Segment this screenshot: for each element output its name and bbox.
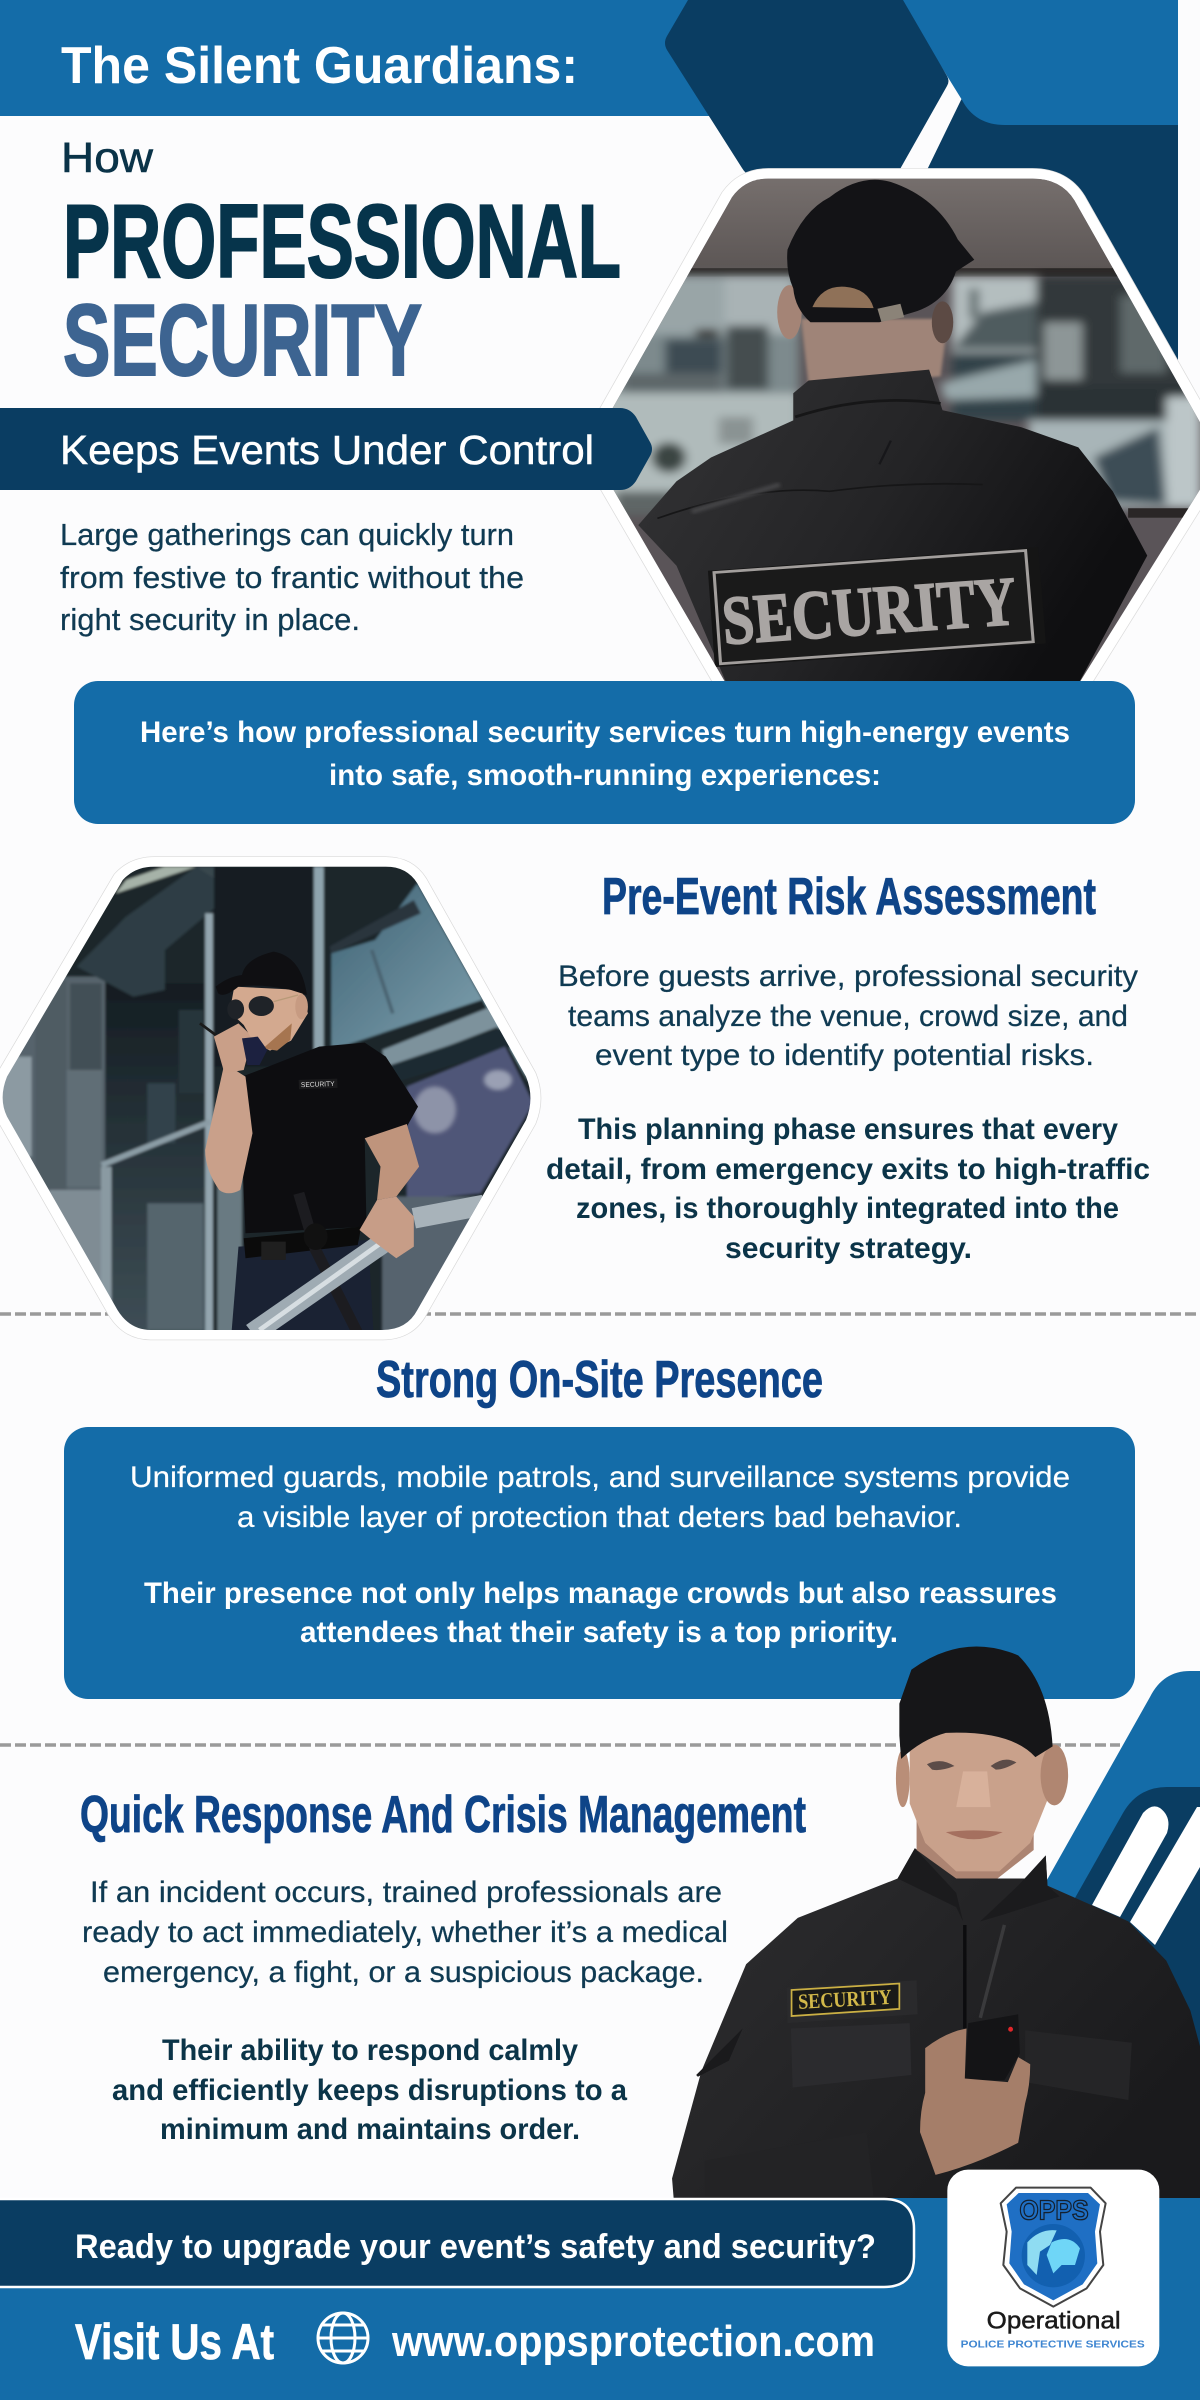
footer website: www.oppsprotection.com — [391, 2317, 875, 2366]
name patch — [787, 1980, 918, 2023]
intro text — [60, 517, 524, 637]
radio — [980, 1925, 1004, 2018]
footer background — [0, 2198, 1200, 2400]
bright glass — [331, 883, 530, 1083]
intro banner: Here’s how professional security services turn high-energy events — [140, 716, 1070, 749]
section one emphasis: This planning phase ensures that every — [578, 1113, 1118, 1146]
top right navy block — [926, 98, 1178, 400]
section three heading: Quick Response And Crisis Management — [80, 1786, 806, 1844]
name patch: SECURITY — [797, 1984, 892, 2014]
cap — [787, 180, 974, 322]
sleeve pocket — [696, 2029, 743, 2077]
divider line one — [0, 1312, 1200, 1316]
cap — [216, 952, 307, 995]
dark window — [105, 983, 210, 1337]
sunglasses — [227, 996, 274, 1019]
overhang — [77, 867, 215, 998]
right arm — [365, 1124, 419, 1200]
head — [230, 987, 308, 1051]
hand — [920, 2029, 1030, 2175]
section three body — [82, 1876, 728, 1989]
section one body: event type to identify potential risks. — [595, 1039, 1094, 1072]
section two heading: Strong On-Site Presence — [376, 1351, 823, 1409]
headline: the silent guardians: The Silent Guardians: — [61, 37, 578, 95]
t-shirt — [242, 1043, 418, 1233]
section one body: Before guests arrive, professional security — [558, 960, 1138, 993]
headline ribbon — [0, 408, 652, 490]
footer visit us label: Visit Us At — [75, 2314, 274, 2370]
section three body: If an incident occurs, trained professionals are — [90, 1876, 722, 1909]
section one emphasis — [546, 1113, 1150, 1265]
section one body — [558, 960, 1138, 1072]
cap — [899, 1646, 1053, 1759]
section two panel: a visible layer of protection that deters bad behavior. — [237, 1501, 962, 1534]
divider line two — [0, 1743, 1120, 1747]
railing — [253, 1243, 382, 1333]
section three emphasis — [112, 2034, 627, 2146]
section one emphasis: zones, is thoroughly integrated into the — [576, 1192, 1119, 1225]
chest pocket left — [791, 2023, 911, 2087]
icon: shield: OPPS — [1019, 2194, 1089, 2225]
footer call to action — [0, 2199, 914, 2287]
section three emphasis: Their ability to respond calmly — [162, 2034, 578, 2067]
baton — [299, 1193, 358, 1333]
section two panel: Their presence not only helps manage crowds but also reassures — [144, 1577, 1057, 1610]
badge: SECURITY — [301, 1080, 335, 1089]
section two panel — [64, 1427, 1135, 1699]
hand on rail — [359, 1197, 414, 1258]
icon: globe — [318, 2313, 368, 2363]
decorative slanted stripes — [1043, 1671, 1200, 2100]
photo: guard in uniform with walkie talkie — [672, 1646, 1200, 2200]
intro banner — [74, 681, 1135, 824]
hand at radio — [214, 1023, 253, 1073]
intro text: right security in place. — [60, 602, 360, 637]
headline ribbon: Keeps Events Under Control — [60, 427, 594, 473]
intro text: Large gatherings can quickly turn — [60, 517, 514, 552]
neck and face — [917, 1804, 1034, 1879]
trousers — [231, 1240, 373, 1333]
icon: shield — [1001, 2188, 1106, 2307]
jacket — [672, 1848, 1200, 2200]
section two panel: Uniformed guards, mobile patrols, and surveillance systems provide — [130, 1461, 1070, 1494]
headline: security: SECURITY — [63, 285, 422, 397]
top right blue block — [900, 0, 1178, 125]
belt — [244, 1227, 361, 1258]
jacket — [638, 370, 1147, 687]
section three emphasis: minimum and maintains order. — [160, 2113, 580, 2146]
section three emphasis: and efficiently keeps disruptions to a — [112, 2074, 627, 2107]
section three body: emergency, a fight, or a suspicious package. — [103, 1956, 704, 1989]
section one body: teams analyze the venue, crowd size, and — [568, 1000, 1128, 1033]
photo: guard from behind watching monitors — [585, 174, 1200, 694]
photo: guard with radio on railing — [0, 863, 544, 1337]
header bar — [0, 0, 760, 116]
back patch: SECURITY — [719, 563, 1020, 660]
logo card — [947, 2170, 1159, 2366]
intro text: from festive to frantic without the — [60, 560, 524, 595]
headline: how: How — [61, 134, 154, 182]
logo tagline: POLICE PROTECTIVE SERVICES — [961, 2339, 1145, 2350]
section one emphasis: security strategy. — [725, 1232, 972, 1265]
radio — [242, 1037, 267, 1065]
left arm — [205, 1063, 253, 1193]
back patch — [708, 547, 1046, 667]
intro banner: into safe, smooth-running experiences: — [329, 759, 881, 792]
neck and ears — [801, 319, 948, 387]
section three body: ready to act immediately, whether it’s a medical — [82, 1916, 728, 1949]
section one emphasis: detail, from emergency exits to high-traffic — [546, 1153, 1150, 1186]
headline: professional: PROFESSIONAL — [63, 184, 621, 300]
sky reflection — [407, 1047, 533, 1200]
chest pocket right — [1025, 2030, 1132, 2100]
building panels left — [18, 975, 107, 1191]
logo wordmark: Operational — [987, 2307, 1121, 2334]
section two panel: attendees that their safety is a top priority. — [300, 1616, 898, 1649]
mullions — [205, 913, 213, 1333]
footer call to action: Ready to upgrade your event’s safety and security? — [75, 2228, 876, 2266]
top navy hexagon — [665, 0, 948, 178]
